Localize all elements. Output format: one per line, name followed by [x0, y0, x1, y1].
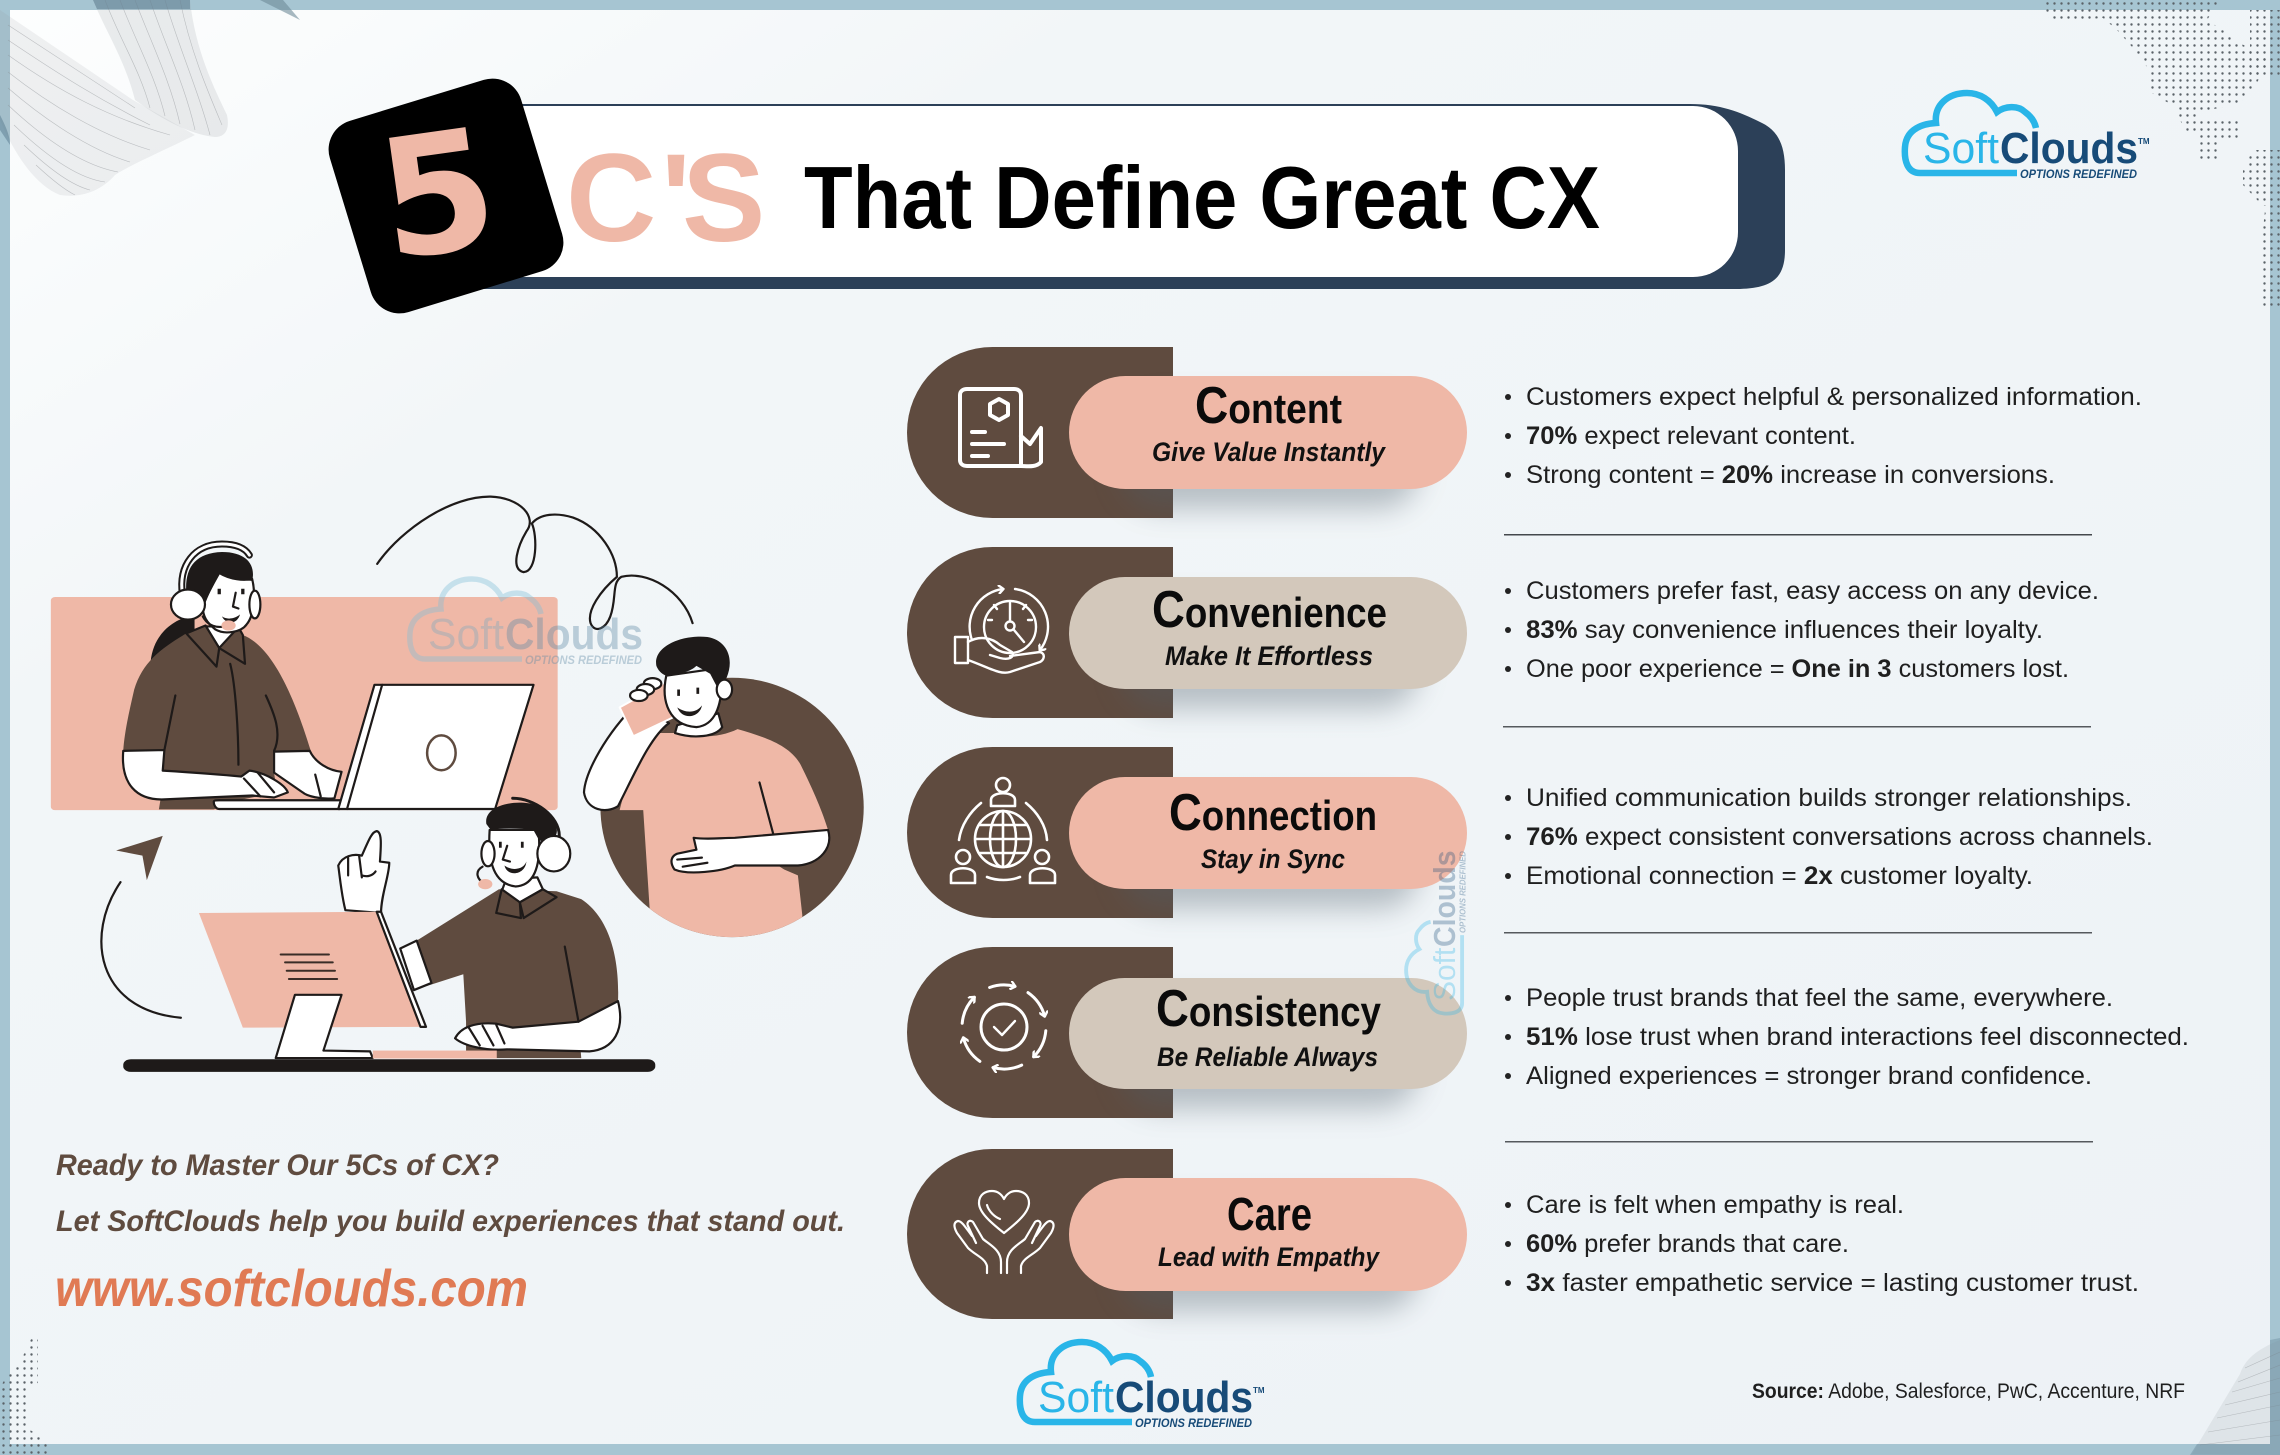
text block: Consistency facts: Aligned experiences = stronger brand confidence.: [1526, 1062, 2092, 1090]
swirl connector line: [377, 497, 693, 629]
text block: Connection facts: [1505, 784, 2153, 890]
text block: Care facts: Care is felt when empathy is real.: [1526, 1191, 1904, 1219]
watermark logo on illustration: OPTIONS REDEFINED: [525, 653, 642, 667]
text block: Content facts: Customers expect helpful & personalized information.: [1526, 383, 2142, 411]
source note: Source: Adobe, Salesforce, PwC, Accenture, NRF: [1752, 1380, 2185, 1403]
dark tab: [907, 947, 1173, 1118]
logo: top right: OPTIONS REDEFINED: [2020, 167, 2137, 181]
title: Connection: [1169, 784, 1377, 842]
woman agent with laptop: [123, 544, 342, 809]
logo: top right: TM: [2138, 137, 2150, 146]
rotated watermark logo: OPTIONS REDEFINED: [1458, 851, 1468, 933]
illustration: customer service team: [51, 497, 864, 1072]
icon: hand holding clock: [955, 589, 1048, 673]
call to action text: [55, 1149, 845, 1318]
text block: Content facts: 70% expect relevant content.: [1526, 422, 1856, 450]
logo: bottom centre: OPTIONS REDEFINED: [1135, 1416, 1252, 1430]
pill: [1069, 376, 1467, 489]
logo: top right: [1905, 93, 2150, 181]
row: Convenience: [907, 547, 1467, 718]
text block: Convenience facts: One poor experience = One in 3 customers lost.: [1526, 655, 2069, 683]
title: Convenience: [1152, 581, 1387, 639]
text block: Convenience facts: 83% say convenience influences their loyalty.: [1526, 616, 2043, 644]
text block: Convenience facts: Customers prefer fast, easy access on any device.: [1526, 577, 2099, 605]
monitor: [199, 912, 497, 1058]
subtitle: Make It Effortless: [1165, 641, 1373, 671]
text block: Consistency facts: 51% lose trust when brand interactions feel disconnected.: [1526, 1023, 2189, 1051]
CTA line one: Ready to Master Our 5Cs of CX?: [56, 1149, 499, 1182]
subtitle: Be Reliable Always: [1157, 1042, 1378, 1072]
website url: www.softclouds.com: [55, 1260, 528, 1318]
icon: cycle with check: [962, 985, 1046, 1069]
pill: [1069, 1178, 1467, 1291]
icon: document: [960, 389, 1041, 466]
text block: Convenience facts: [1505, 577, 2099, 683]
logo: top right: Soft: [1923, 124, 1999, 173]
dark tab: [907, 347, 1173, 518]
pill: [1069, 577, 1467, 689]
decorative dot map: top right: [2042, 0, 2280, 310]
text block: Care facts: 3x faster empathetic service = lasting customer trust.: [1526, 1269, 2139, 1297]
dark tab: [907, 747, 1173, 918]
logo: bottom centre: Soft: [1038, 1373, 1114, 1422]
text block: Care facts: [1505, 1191, 2139, 1297]
banner white box: [480, 106, 1738, 277]
laptop: [214, 685, 534, 809]
man at desk with monitor: [338, 798, 620, 1058]
subtitle: Give Value Instantly: [1152, 437, 1387, 467]
text block: Connection facts: Emotional connection = 2x customer loyalty.: [1526, 862, 2033, 890]
row: Care: [907, 1149, 1467, 1319]
title: Consistency: [1156, 980, 1382, 1038]
icon: hands holding heart: [954, 1191, 1054, 1273]
title text: That Define Great CX: [804, 148, 1600, 247]
banner back shadow: [482, 104, 1785, 289]
rotated watermark logo: [1406, 850, 1468, 1014]
logo: bottom centre: Clouds: [1115, 1373, 1253, 1422]
decorative mesh: bottom right: [2190, 1338, 2280, 1455]
black tile: [321, 71, 571, 321]
logo: top right: Clouds: [2000, 124, 2138, 173]
pill: [1069, 777, 1467, 889]
icon: global people: [951, 778, 1055, 883]
text block: Content facts: Strong content = 20% increase in conversions.: [1526, 461, 2055, 489]
rotated watermark logo: Soft: [1427, 947, 1462, 1001]
watermark logo on illustration: [410, 579, 643, 667]
row: Content: [907, 347, 1467, 518]
title: Content: [1195, 377, 1342, 435]
text block: Consistency facts: People trust brands that feel the same, everywhere.: [1526, 984, 2113, 1012]
title: Care: [1227, 1188, 1312, 1240]
peach panel: [51, 597, 558, 810]
text block: Content facts: [1505, 383, 2142, 489]
subtitle: Stay in Sync: [1201, 844, 1345, 874]
pill: [1069, 978, 1467, 1089]
man on phone circle: [584, 637, 864, 954]
text block: Consistency facts: [1505, 984, 2189, 1090]
title banner: [321, 71, 1785, 321]
row: Connection: [907, 747, 1467, 918]
decorative mesh: top left: [0, 0, 300, 196]
desk bar: [123, 1059, 655, 1072]
logo: bottom centre: [1020, 1342, 1265, 1430]
number five: 5: [367, 92, 508, 298]
row: Consistency: [907, 947, 1467, 1118]
dark tab: [907, 547, 1173, 718]
dark tab: [907, 1149, 1173, 1319]
curved arrow with cursor head: [101, 836, 181, 1018]
text block: Connection facts: 76% expect consistent conversations across channels.: [1526, 823, 2153, 851]
C'S heading: C'S: [566, 129, 765, 268]
CTA line two: Let SoftClouds help you build experiences that stand out.: [56, 1205, 845, 1238]
text block: Connection facts: Unified communication builds stronger relationships.: [1526, 784, 2132, 812]
rotated watermark logo: Clouds: [1427, 850, 1462, 947]
text block: Care facts: 60% prefer brands that care.: [1526, 1230, 1849, 1258]
subtitle: Lead with Empathy: [1158, 1242, 1381, 1272]
decorative dots: bottom left: [0, 1335, 50, 1455]
watermark logo on illustration: Soft: [428, 610, 504, 659]
logo: bottom centre: TM: [1253, 1386, 1265, 1395]
watermark logo on illustration: Clouds: [505, 610, 643, 659]
